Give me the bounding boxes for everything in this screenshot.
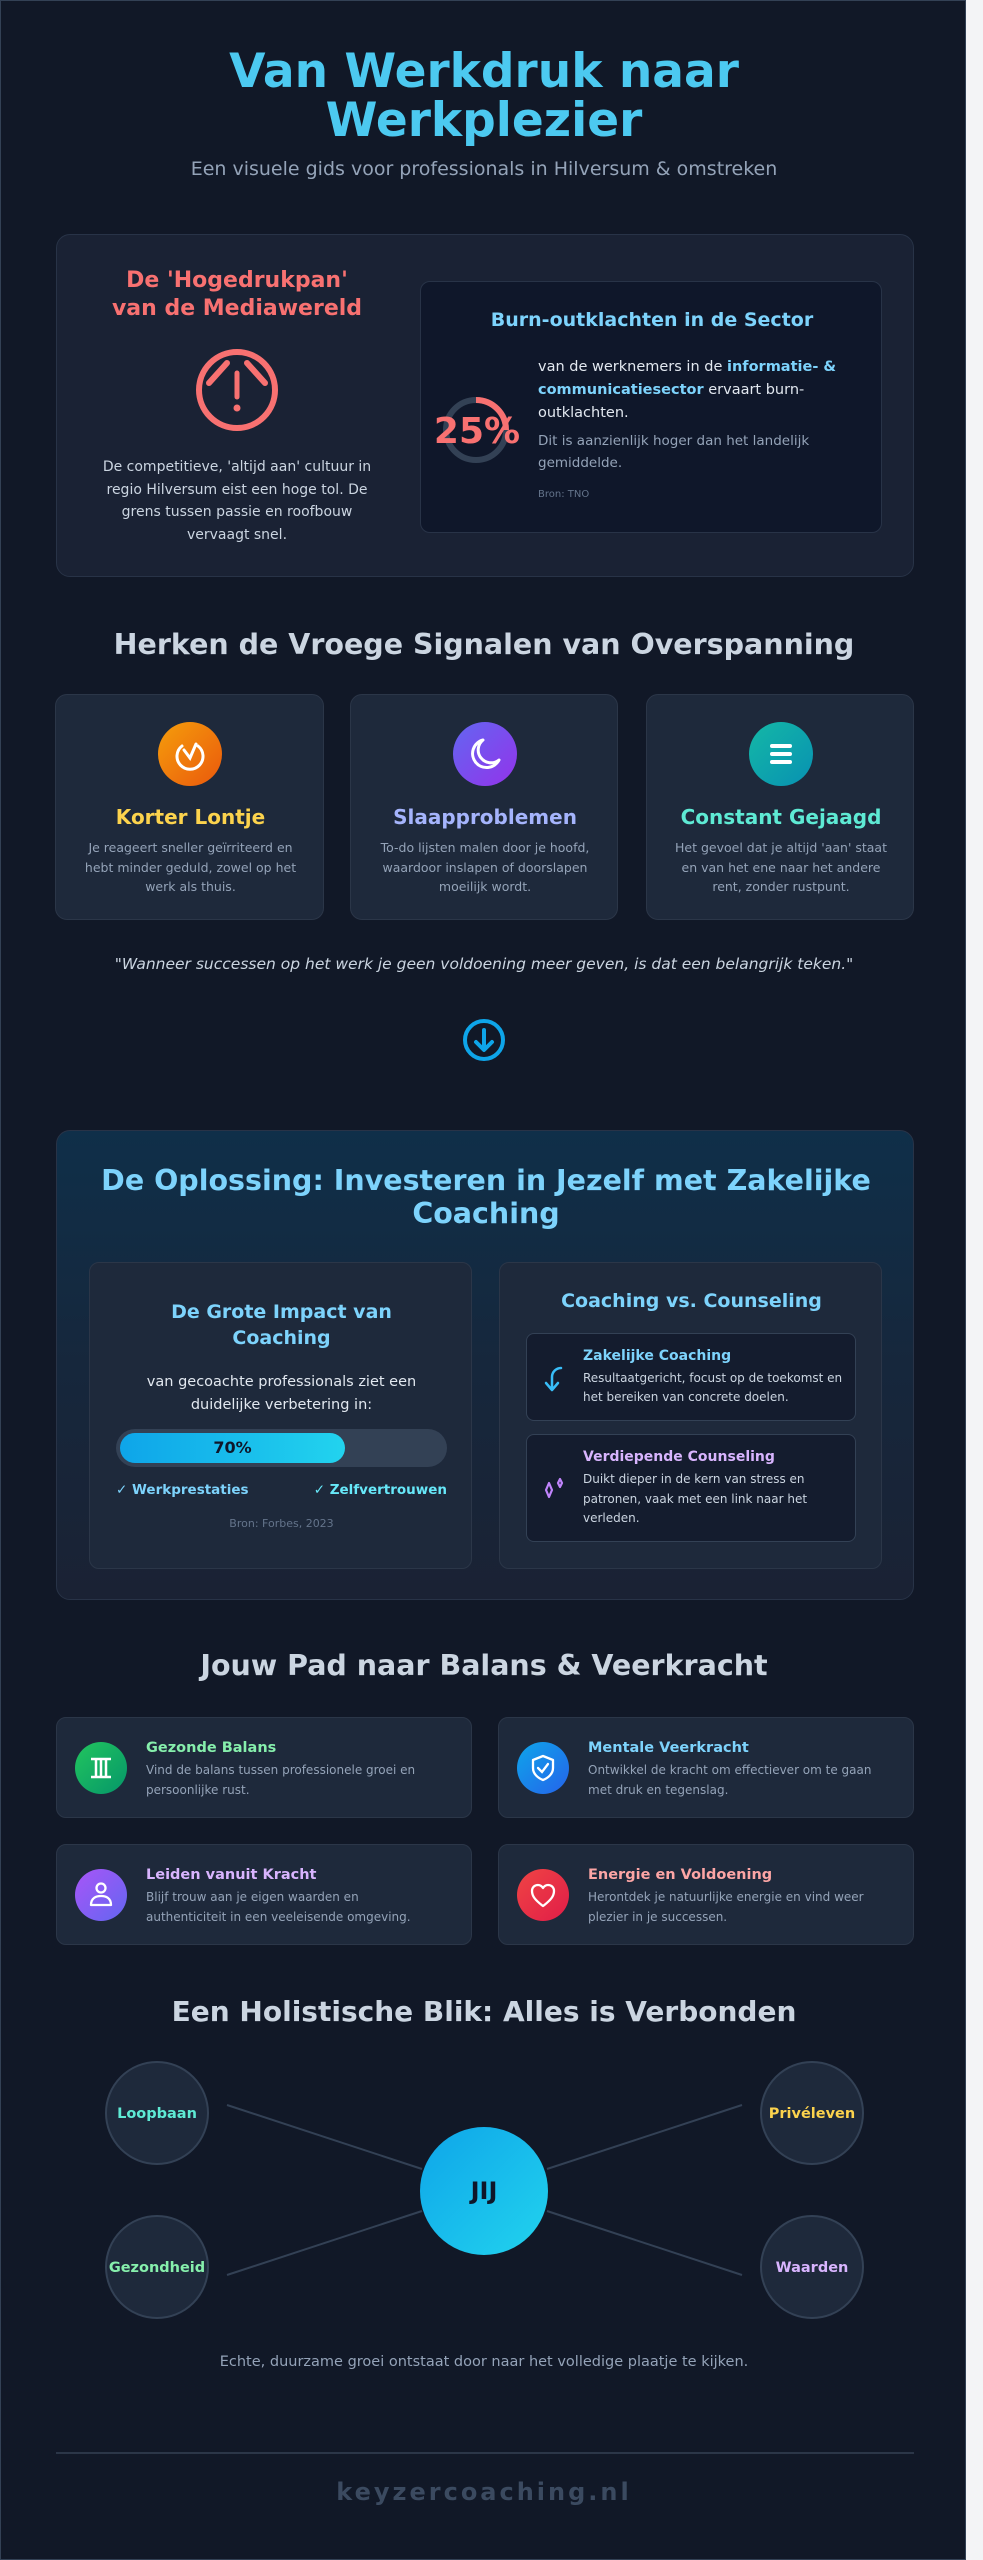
diagram: holistisch: Waarden [776,2260,848,2276]
desc: To-do lijsten malen door je hoofd, waardoor inslapen of doorslapen moeilijk wordt. [381,840,589,894]
icon: person [75,1869,127,1921]
desc: authenticiteit in een veeleisende omgeving. [146,1910,411,1924]
card: slaapproblemen [350,694,618,920]
bar chart: 70% [116,1429,447,1467]
bar chart: 70%: 70% [213,1438,252,1457]
text: stat description: van de werknemers in de informatie- & communicatiesector ervaart burn-outklachten. [538,359,836,421]
desc: Resultaatgericht, focust op de toekomst en het bereiken van concrete doelen. [583,1371,842,1404]
heading: hogedrukpan: van de Mediawereld [112,296,362,321]
text: impact: van gecoachte professionals ziet een duidelijke verbetering in: [147,1374,416,1413]
icon: shield [517,1742,569,1794]
text: comparison: Dit is aanzienlijk hoger dan het landelijk gemiddelde. [538,433,809,471]
title: Leiden vanuit Kracht [146,1867,316,1883]
heading: impact: Coaching [232,1327,331,1349]
title: Gezonde Balans [146,1740,276,1756]
desc: Het gevoel dat je altijd 'aan' staat en van het ene naar het andere rent, zonder rustpunt. [675,840,887,894]
title: korter lontje: Korter Lontje [116,805,265,829]
desc: Duikt dieper in de kern van stress en patronen, vaak met een link naar het verleden. [583,1472,807,1525]
icon: sparkles [544,1478,564,1498]
heading: oplossing [101,1164,871,1230]
card: gezonde balans [56,1717,472,1818]
heading: hogedrukpan: De 'Hogedrukpan' [126,268,348,293]
icon: lines [749,722,813,786]
footer: keyzercoaching.nl [336,2478,632,2506]
card: energie [498,1844,914,1945]
title: Energie en Voldoening [588,1867,772,1883]
heading: hogedrukpan [112,268,362,321]
title: Werkplezier [326,93,642,148]
box: zakelijke coaching [526,1333,856,1421]
caption: Echte, duurzame groei ontstaat door naar het volledige plaatje te kijken. [220,2354,748,2370]
icon: fuse [158,722,222,786]
card: korter lontje [55,694,324,920]
heading: impact [171,1301,392,1349]
diagram: holistisch: JIJ [469,2177,497,2205]
icon: pillars [75,1742,127,1794]
desc: Ontwikkel de kracht om effectiever om te gaan [588,1763,872,1777]
card: mentale veerkracht [498,1717,914,1818]
heading: impact: De Grote Impact van [171,1301,392,1323]
title: slaapproblemen: Slaapproblemen [393,805,577,829]
title: Verdiepende Counseling [583,1449,775,1465]
desc: Herontdek je natuurlijke energie en vind weer plezier in je successen. [588,1890,864,1924]
chart: 25% donut [435,397,520,463]
icon: arrow [544,1366,562,1392]
title: Zakelijke Coaching [583,1348,731,1364]
desc: Vind de balans tussen professionele groei en persoonlijke rust. [146,1763,415,1796]
diagram: holistisch: Privéleven [769,2106,855,2122]
panel: burn-out stat [420,281,882,533]
source: Bron: TNO [538,489,589,500]
checks: ✓ Zelfvertrouwen [314,1482,447,1498]
heading: oplossing: De Oplossing: Investeren in Jezelf met Zakelijke [101,1164,871,1197]
desc [588,1763,872,1796]
panel: hogedrukpan [56,234,914,577]
title [229,44,739,148]
checks: ✓ Werkprestaties [116,1482,249,1498]
checks [116,1482,447,1498]
title: constant gejaagd: Constant Gejaagd [681,805,881,829]
panel: oplossing [56,1130,914,1600]
heading: signalen: Herken de Vroege Signalen van Overspanning [114,628,854,661]
title: Mentale Veerkracht [588,1740,749,1756]
icon: moon [453,722,517,786]
quote: "Wanneer successen op het werk je geen voldoening meer geven, is dat een belangrijk teken." [115,955,853,973]
diagram: holistisch: Gezondheid [109,2260,205,2276]
source: Bron: Forbes, 2023 [229,1517,334,1530]
icon: pressure gauge [196,349,278,431]
diagram: holistisch [105,2061,864,2319]
title: Van Werkdruk naar [229,44,739,99]
diagram: holistisch: Loopbaan [117,2106,197,2122]
desc [146,1890,411,1924]
card: coaching vs counseling [499,1262,882,1569]
heading: pad: Jouw Pad naar Balans & Veerkracht [200,1649,768,1682]
card: constant gejaagd [646,694,914,920]
icon: heart [517,1869,569,1921]
box: verdiepende counseling [526,1434,856,1542]
desc: met druk en tegenslag. [588,1782,728,1796]
desc: Je reageert sneller geïrriteerd en hebt minder geduld, zowel op het werk als thuis. [85,840,296,894]
desc: Blijf trouw aan je eigen waarden en [146,1890,359,1904]
heading: burn-out: Burn-outklachten in de Sector [491,309,813,331]
text: hogedrukpan: De competitieve, 'altijd aan' cultuur in regio Hilversum eist een hoge tol. De grens tussen passie en roofbouw vervaagt snel. [103,459,371,542]
card: leiden vanuit kracht [56,1844,472,1945]
icon: down arrow [463,1019,505,1061]
chart: 25% donut: 25% [435,411,520,452]
heading: holistisch: Een Holistische Blik: Alles is Verbonden [172,1995,796,2028]
card: impact [89,1262,472,1569]
heading: oplossing: Coaching [412,1197,560,1230]
subtitle: Een visuele gids voor professionals in Hilversum & omstreken [191,158,777,180]
heading: vs: Coaching vs. Counseling [561,1290,822,1312]
